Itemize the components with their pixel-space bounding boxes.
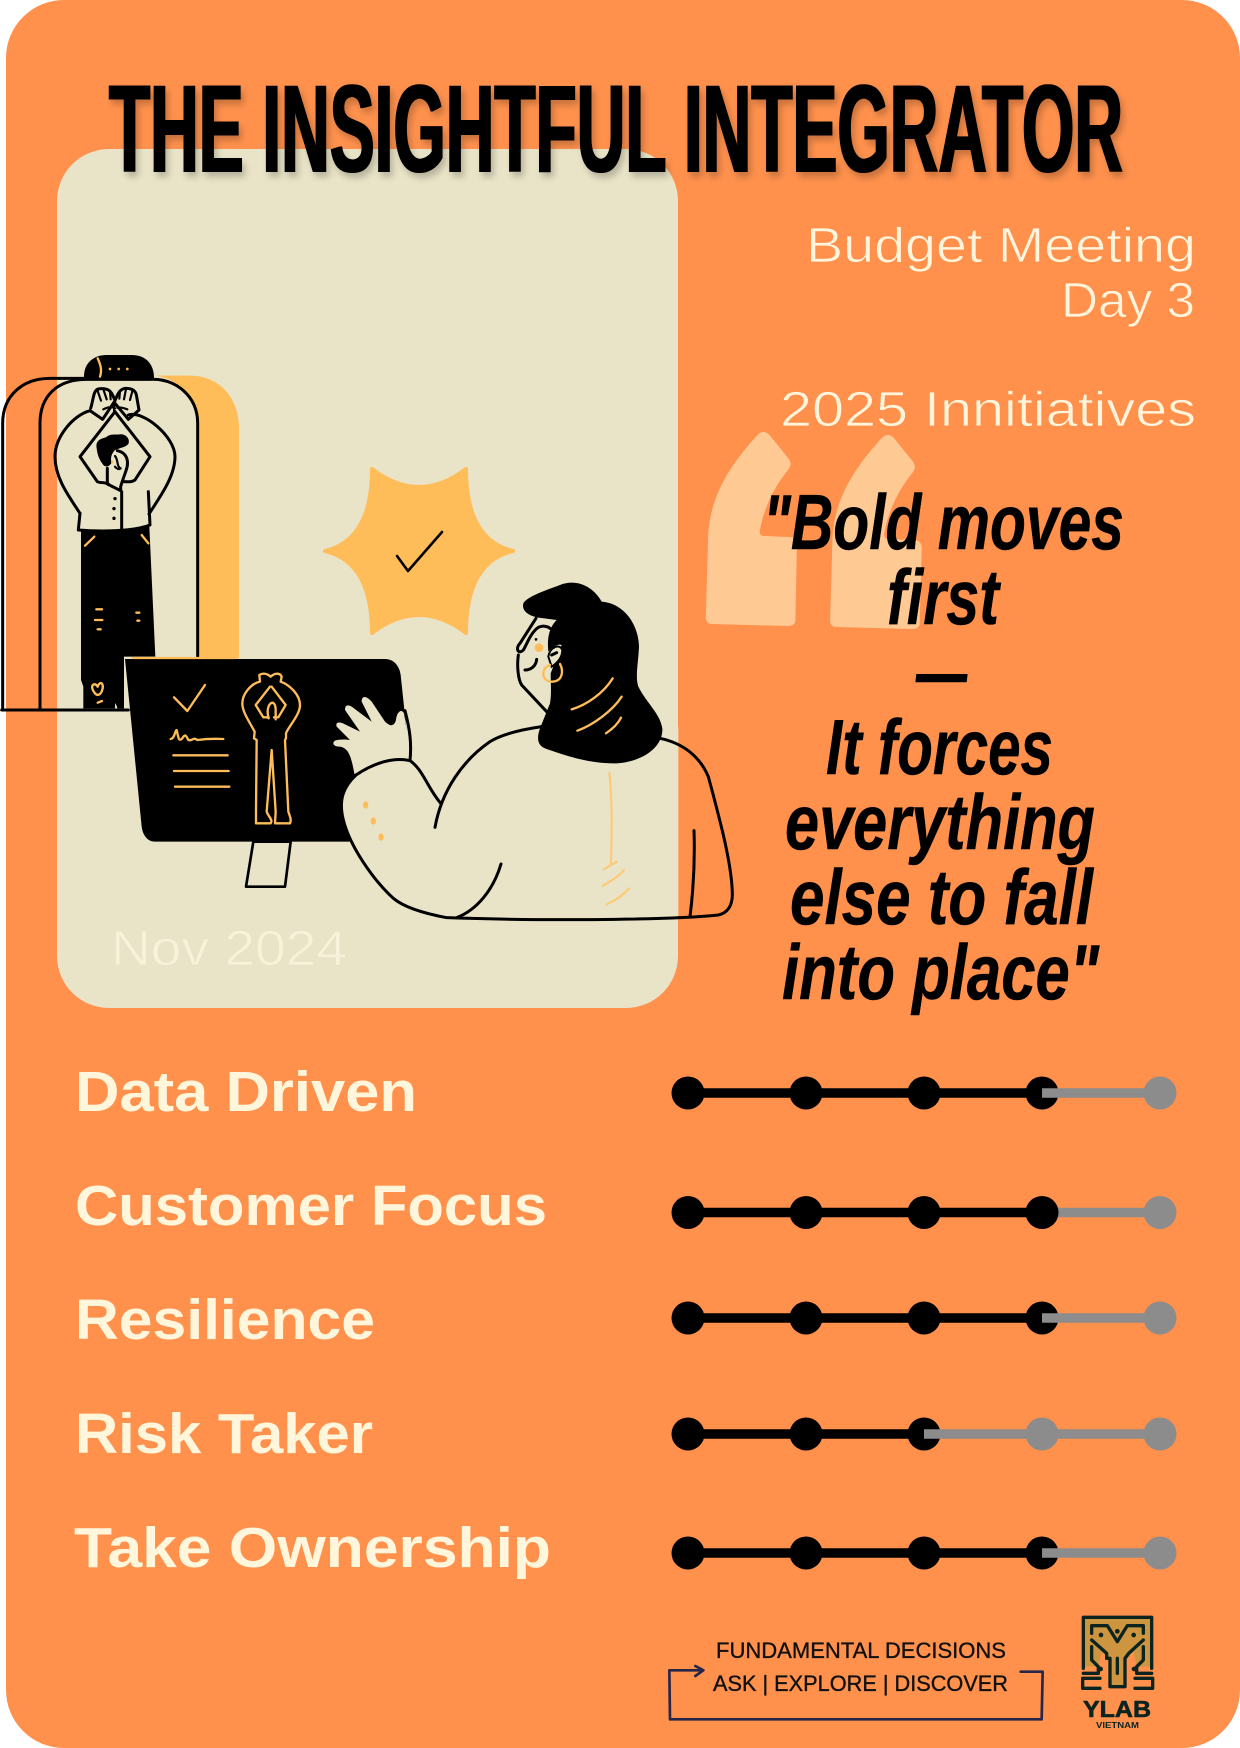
icon: large quotation mark	[706, 432, 922, 629]
arrow: loop arrow around footer text	[669, 1666, 1043, 1719]
icon: amber star badge with check	[325, 469, 513, 633]
quote text: else to fall	[790, 853, 1094, 941]
quote text: "Bold moves	[763, 478, 1124, 566]
rating row: Customer Focus	[75, 1174, 1176, 1238]
subtitle: budget meeting day 3: Budget Meeting	[806, 219, 1196, 273]
subtitle: 2025 initiatives: 2025 Innitiatives	[780, 383, 1196, 437]
footer: fundamental decisions text: ASK | EXPLORE | DISCOVER	[713, 1671, 1008, 1696]
rating row: Risk Taker: Risk Taker	[75, 1402, 373, 1466]
logo: YLAB Vietnam: VIETNAM	[1096, 1721, 1139, 1730]
rating row: Resilience: Resilience	[75, 1288, 375, 1352]
rating row: Customer Focus: Customer Focus	[75, 1174, 547, 1238]
rating row: Data Driven	[75, 1060, 1176, 1124]
rating row: Take Ownership: Take Ownership	[74, 1516, 551, 1580]
rating row: Risk Taker	[75, 1402, 1176, 1466]
quote text	[763, 478, 1124, 1016]
quote text: everything	[785, 778, 1095, 866]
illustration: woman seated at desk	[333, 583, 732, 920]
rating row: Data Driven: Data Driven	[75, 1060, 417, 1124]
logo: YLAB Vietnam	[1083, 1617, 1153, 1730]
subtitle: budget meeting day 3: Day 3	[1061, 274, 1195, 328]
quote text: into place"	[782, 928, 1100, 1016]
quote text: —	[915, 628, 968, 716]
quote text: It forces	[826, 703, 1053, 791]
label: Nov 2024 date: Nov 2024	[111, 922, 347, 976]
logo: YLAB Vietnam: YLAB	[1083, 1696, 1151, 1722]
illustration: standing man under arches	[2, 355, 239, 710]
quote text: first	[887, 553, 1001, 641]
rating row: Take Ownership	[74, 1516, 1176, 1580]
rating row: Resilience	[75, 1288, 1176, 1352]
footer: fundamental decisions text	[713, 1638, 1008, 1696]
panel: beige illustration card	[57, 149, 678, 1008]
footer: fundamental decisions text: FUNDAMENTAL DECISIONS	[716, 1638, 1006, 1663]
subtitle: budget meeting day 3	[806, 219, 1196, 328]
illustration: computer monitor with figure on screen	[125, 658, 418, 887]
